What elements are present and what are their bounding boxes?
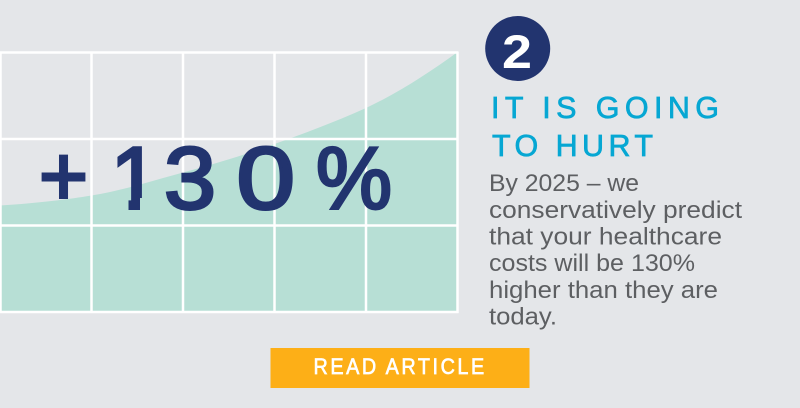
body text: that your healthcare [489,224,722,250]
big number: +130%: % [316,128,392,228]
body text: costs will be 130% [489,250,695,277]
body text: conservatively predict [489,197,742,224]
big number: +130%: + [39,129,88,223]
chart area curve [0,52,457,312]
big number: +130%: 1 [110,128,159,228]
heading: IT IS GOING [491,91,719,125]
big number: +130% [42,146,390,211]
big number: +130%: 0 [236,128,295,228]
number badge [485,16,550,81]
big number: +130%: 3 [164,128,216,228]
badge circle [485,16,550,81]
body text [489,170,742,330]
button background [270,348,530,388]
chart grid [0,52,458,313]
heading: TO HURT [492,129,653,163]
body text: today. [489,304,557,330]
body text: higher than they are [489,277,718,304]
chart: rising healthcare cost area on grid [0,52,458,313]
badge numeral: 2 [502,25,532,78]
body text: By 2025 – we [489,170,639,197]
button label: READ ARTICLE [314,355,484,379]
heading [491,91,719,163]
button: read article [270,348,530,388]
